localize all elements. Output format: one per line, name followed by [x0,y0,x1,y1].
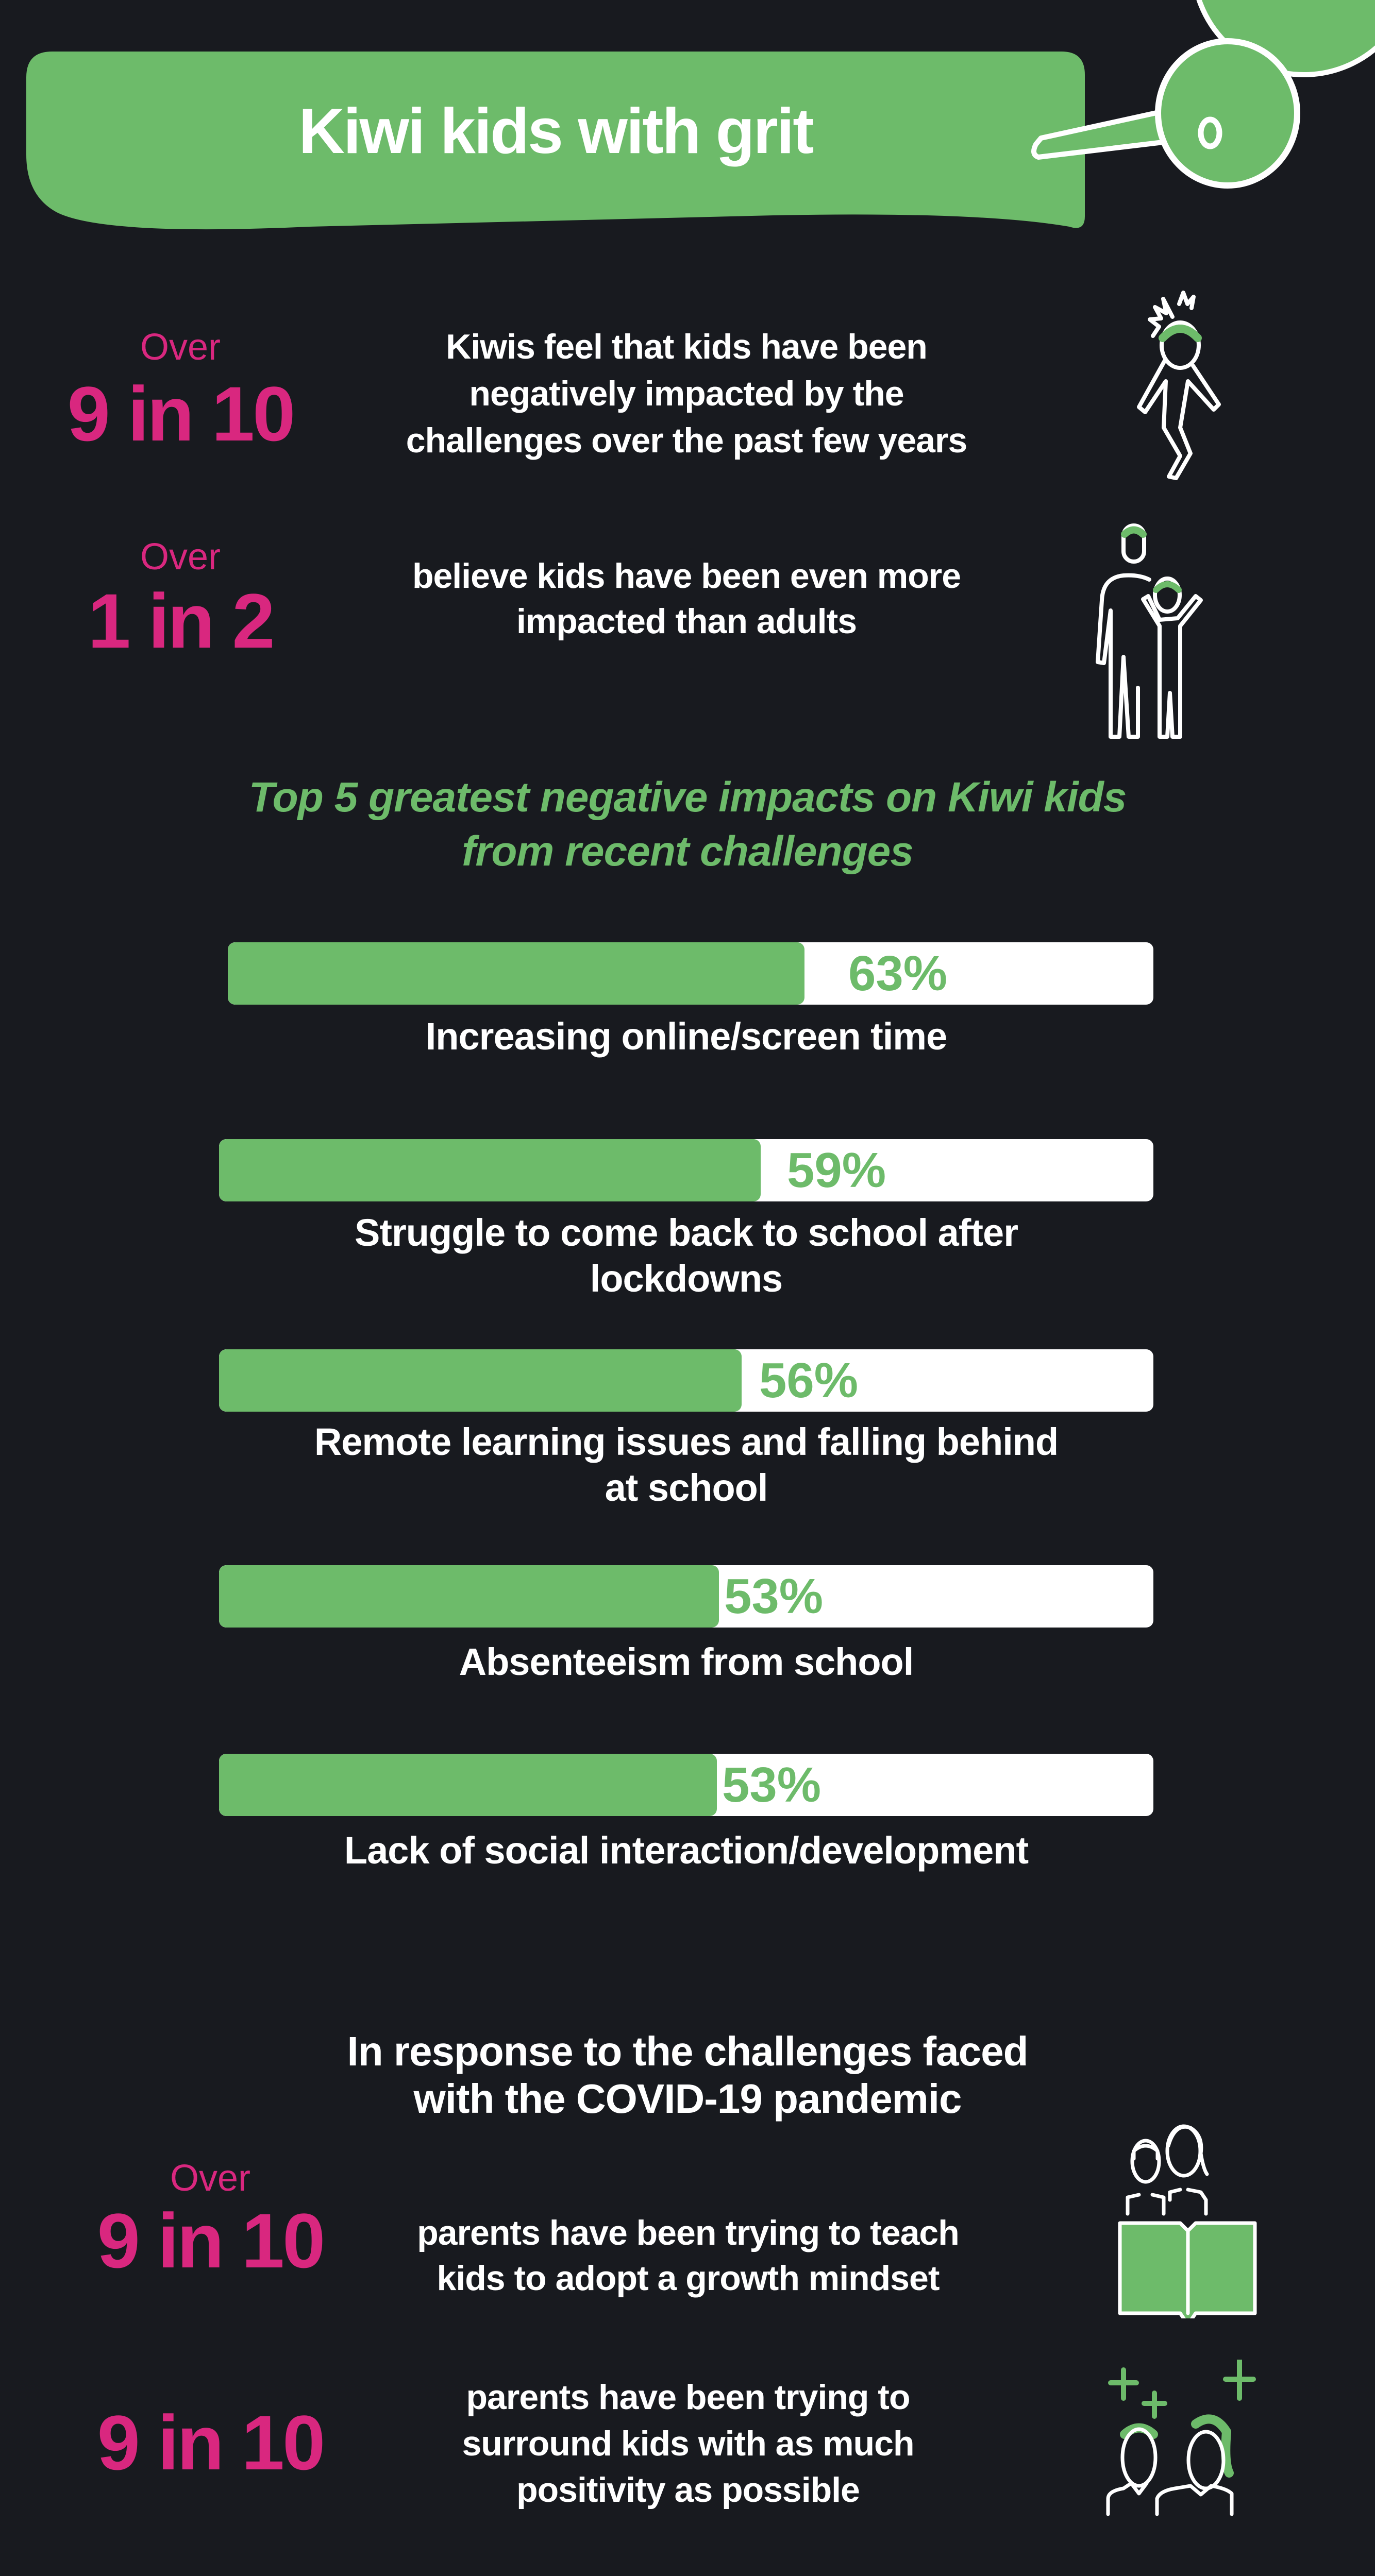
stat row 1: over 9 in 10: Kiwis feel that kids have been [446,327,927,366]
bar 5: 53% [722,1757,821,1812]
label 3 [314,1420,1058,1509]
stat row 1: over 9 in 10: challenges over the past few years [406,421,967,460]
stat row 4: positivity: surround kids with as much [462,2424,914,2463]
stat row 4: positivity [97,2360,1256,2516]
stat row 3: growth mindset: parents have been trying to teach [417,2213,959,2252]
label 4: Absenteeism from school [459,1640,913,1683]
stat row 2: over 1 in 2: believe kids have been even more [412,556,961,596]
bar 2 [219,1139,1153,1201]
icon: stressed child [1137,291,1221,480]
icon: kids with plus signs [1106,2360,1256,2516]
stat row 2: over 1 in 2: 1 in 2 [88,578,273,664]
heading: top 5 impacts [249,774,1126,875]
stat row 1: over 9 in 10: negatively impacted by the [469,374,904,413]
bar 1 [228,942,1153,1005]
label 3: at school [605,1466,767,1509]
stat row 3: growth mindset [97,2125,1256,2318]
bar 4 [219,1565,1153,1628]
stat row 1: over 9 in 10: 9 in 10 [68,370,293,457]
label 2: lockdowns [590,1257,782,1300]
stat row 3: growth mindset: Over [170,2158,250,2199]
stat row 2: over 1 in 2 [88,523,1203,739]
icon: parents and book [1118,2125,1256,2318]
label 3: Remote learning issues and falling behind [314,1420,1058,1463]
stat row 4: positivity: positivity as possible [516,2470,860,2510]
bar 5 [219,1754,1153,1816]
title text: Kiwi kids with grit [298,96,813,167]
title banner [26,38,1300,230]
stat row 3: growth mindset: 9 in 10 [97,2197,323,2284]
bar chart [219,942,1153,1872]
stat row 2: over 1 in 2: Over [140,536,221,578]
label 1: Increasing online/screen time [426,1015,947,1058]
bar 3: 56% [759,1353,858,1408]
label 2 [355,1211,1018,1300]
bar 4: 53% [724,1569,823,1624]
heading: covid response: In response to the challenges faced [347,2028,1028,2074]
decor: top-right kiwi circle [1197,0,1375,77]
heading: top 5 impacts: from recent challenges [462,828,913,875]
label 5: Lack of social interaction/development [344,1829,1028,1872]
stat row 1: over 9 in 10 [68,291,1221,480]
stat row 4: positivity: parents have been trying to [466,2378,910,2417]
icon: adult and child [1096,523,1203,739]
stat row 3: growth mindset: kids to adopt a growth mindset [437,2259,939,2298]
bar 2: 59% [787,1143,886,1198]
stat row 1: over 9 in 10: Over [140,327,221,368]
stat row 4: positivity: 9 in 10 [97,2399,323,2486]
label 2: Struggle to come back to school after [355,1211,1018,1254]
bar 3 [219,1349,1153,1412]
bar 1: 63% [848,946,947,1001]
stat row 2: over 1 in 2: impacted than adults [516,602,857,641]
heading: covid response: with the COVID-19 pandemic [413,2076,962,2122]
heading: top 5 impacts: Top 5 greatest negative impacts on Kiwi kids [249,774,1126,821]
heading: covid response [347,2028,1028,2122]
